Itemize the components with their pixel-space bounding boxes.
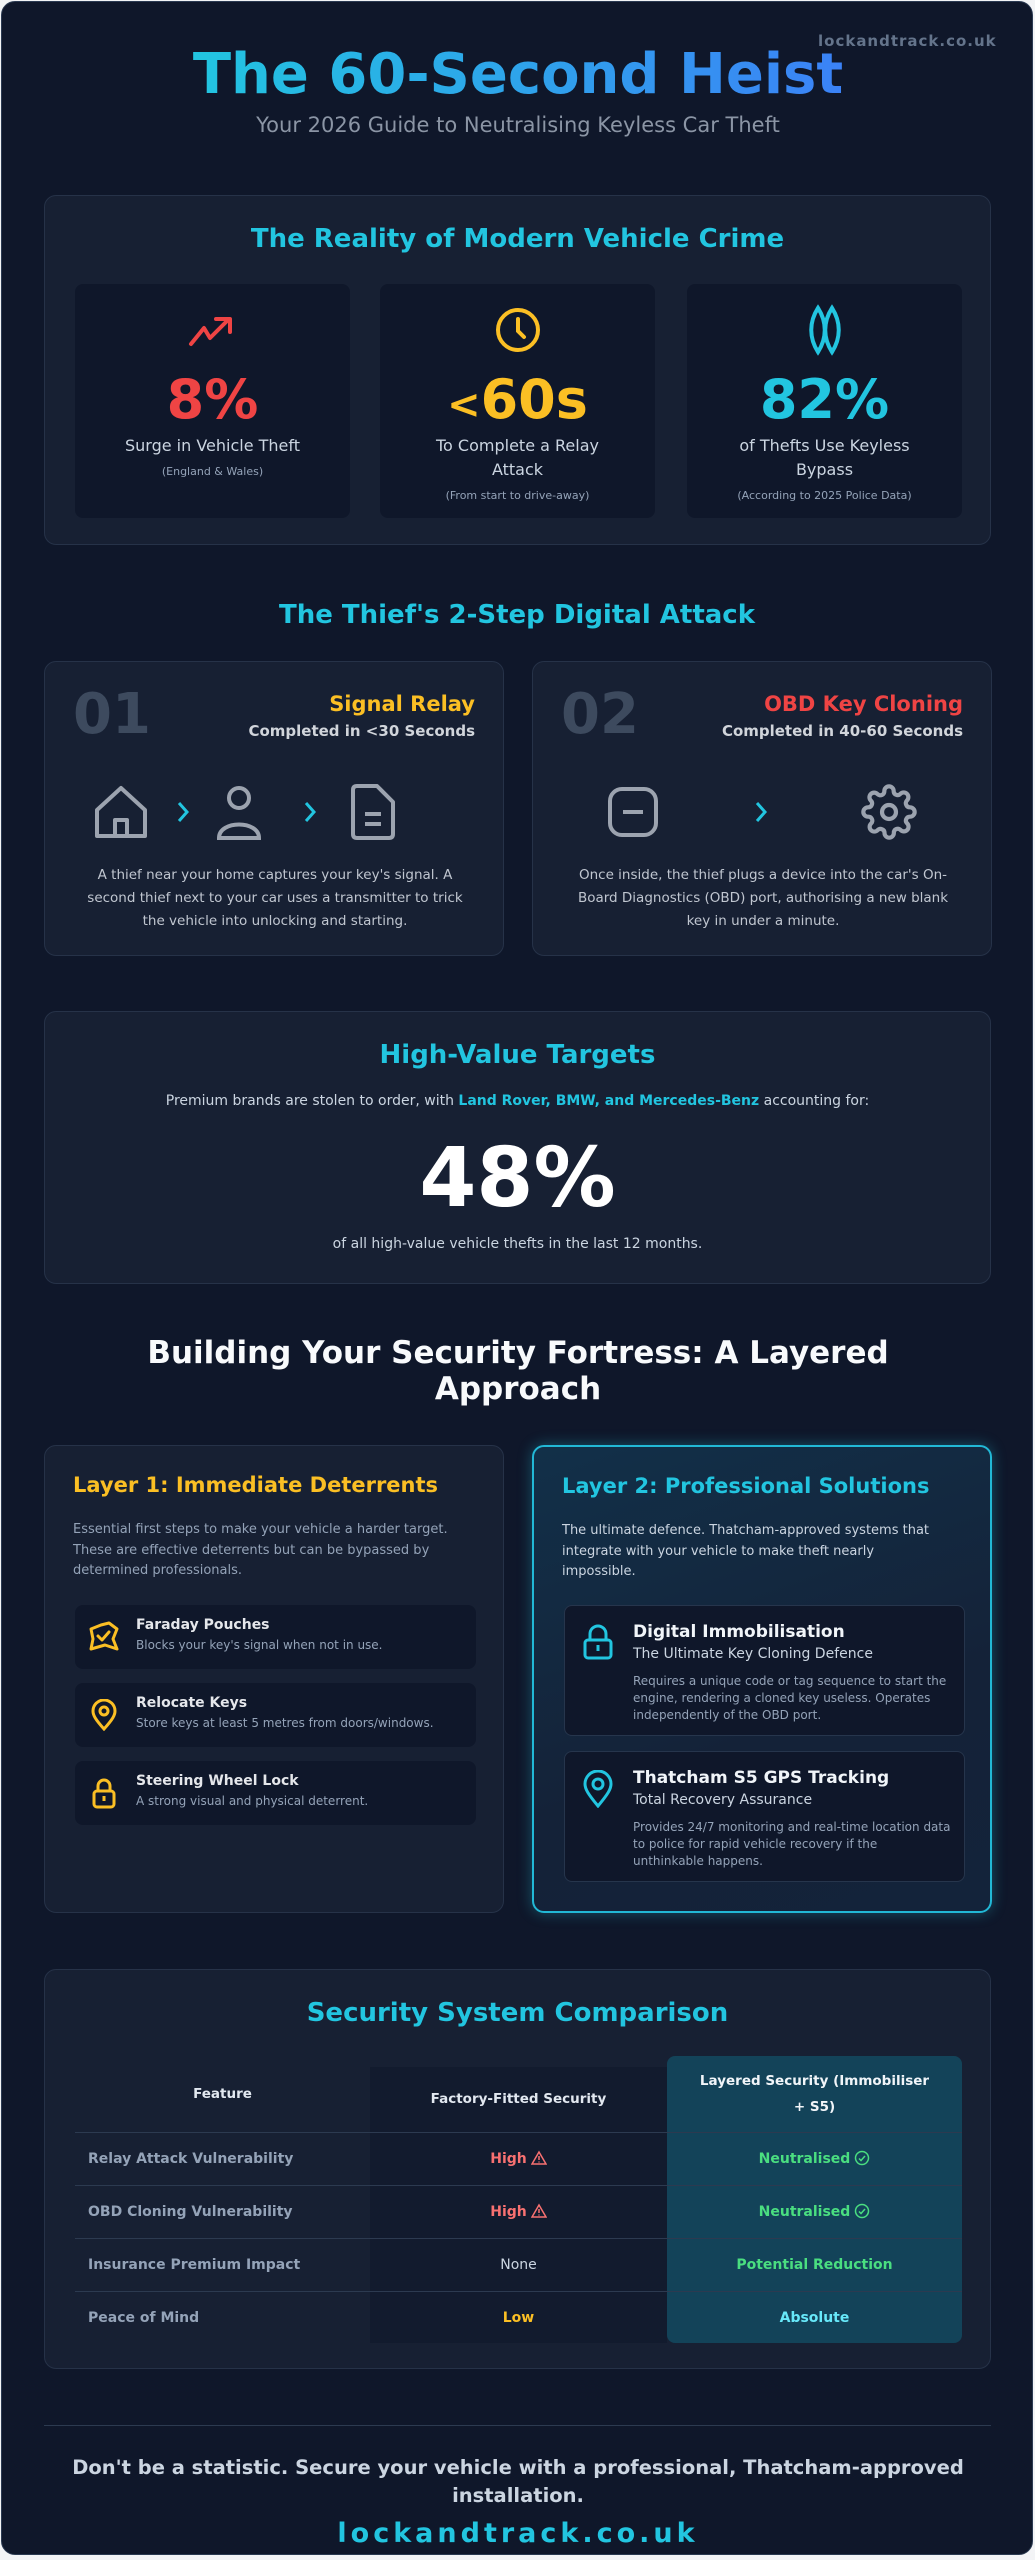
- item: steering wheel lock: A strong visual and physical deterrent.: [136, 1794, 368, 1808]
- stat: 82%: of Thefts Use Keyless Bypass: [739, 436, 910, 479]
- panel: comparison table: Potential Reduction: [736, 2256, 893, 2272]
- icon: signal: [809, 304, 841, 356]
- icon flow: port, gear: [608, 784, 917, 840]
- item: relocate keys: [75, 1683, 476, 1747]
- icon flow: house, person, doc: [95, 784, 395, 840]
- stat: 82%: (According to 2025 Police Data): [737, 489, 912, 502]
- panel: layer 2 professional: [532, 1445, 992, 1913]
- panel: comparison table: Absolute: [780, 2310, 849, 2326]
- panel: comparison table: High: [490, 2204, 527, 2220]
- panel: comparison table: [44, 1969, 991, 2369]
- comparison table: [75, 2056, 962, 2343]
- layer 2 description: The ultimate defence. Thatcham-approved systems that integrate with your vehicle to make theft nearly impossible.: [562, 1523, 929, 1579]
- step title: Completed in 40-60 Seconds: [722, 722, 963, 740]
- layer 1 heading: Layer 1: Immediate Deterrents: [73, 1473, 438, 1497]
- heading: comparison: Security System Comparison: [307, 1998, 728, 2028]
- step description: Once inside, the thief plugs a device into the car's On-Board Diagnostics (OBD) port, authorising a new blank key in under a minute.: [578, 867, 948, 929]
- panel: comparison table: Feature: [193, 2086, 252, 2102]
- panel: layer 1 deterrents: [44, 1445, 504, 1913]
- panel: comparison table: Neutralised: [759, 2204, 850, 2220]
- panel: comparison table: Layered Security (Immobiliser: [700, 2073, 929, 2089]
- heading: two-step attack: The Thief's 2-Step Digital Attack: [279, 600, 755, 630]
- item: faraday pouches: [75, 1605, 476, 1669]
- stat: 60s: [380, 284, 655, 518]
- panel: step 2 OBD cloning: [532, 661, 992, 956]
- stat: 8%: Surge in Vehicle Theft: [125, 436, 300, 455]
- stat: 60s: To Complete a Relay Attack: [436, 436, 599, 479]
- item: S5 GPS tracking: [564, 1751, 965, 1882]
- step title: OBD Key Cloning: [764, 692, 963, 716]
- site tag top right: lockandtrack.co.uk: [818, 32, 997, 50]
- item: faraday pouches: Blocks your key's signal when not in use.: [136, 1638, 382, 1652]
- panel: high-value targets: [44, 1011, 991, 1284]
- icon: clock: [496, 308, 540, 352]
- panel: comparison table: Peace of Mind: [88, 2310, 199, 2326]
- heading: reality: The Reality of Modern Vehicle Crime: [251, 224, 784, 254]
- panel: comparison table: Low: [503, 2310, 534, 2326]
- website url: lockandtrack.co.uk: [337, 2518, 699, 2549]
- stat: 82%: [687, 284, 962, 518]
- step title: Completed in <30 Seconds: [248, 722, 475, 740]
- subtitle: Your 2026 Guide to Neutralising Keyless Car Theft: [256, 113, 780, 137]
- item: steering wheel lock: Steering Wheel Lock: [136, 1773, 299, 1789]
- item: faraday pouches: Faraday Pouches: [136, 1617, 270, 1633]
- icon: trend up: [188, 317, 232, 346]
- CTA text: Don't be a statistic. Secure your vehicle with a professional, Thatcham-approved installation.: [72, 2456, 964, 2507]
- title: The 60-Second Heist: [193, 42, 843, 107]
- item: relocate keys: Relocate Keys: [136, 1695, 247, 1711]
- item: digital immobilisation: [564, 1605, 965, 1736]
- layer 2 heading: Layer 2: Professional Solutions: [562, 1474, 929, 1498]
- step description: A thief near your home captures your key's signal. A second thief next to your car uses a transmitter to trick the vehicle into unlocking and starting.: [87, 867, 463, 929]
- panel: comparison table: High: [490, 2151, 527, 2167]
- panel: comparison table: Factory-Fitted Security: [431, 2091, 606, 2107]
- stat: 60s: (From start to drive-away): [446, 489, 589, 502]
- stat: 82%: 82%: [760, 368, 889, 431]
- step title: Signal Relay: [329, 692, 475, 716]
- footnote text: of all high-value vehicle thefts in the last 12 months.: [333, 1236, 702, 1252]
- panel: comparison table: + S5): [794, 2099, 835, 2115]
- item: S5 GPS tracking: Total Recovery Assurance: [633, 1792, 812, 1808]
- item: digital immobilisation: Digital Immobilisation: [633, 1622, 845, 1642]
- stat: 60s: <60s: [447, 368, 588, 431]
- stat: 8%: [75, 284, 350, 518]
- item: digital immobilisation: The Ultimate Key Cloning Defence: [633, 1646, 873, 1662]
- panel: comparison table: Relay Attack Vulnerability: [88, 2150, 293, 2166]
- panel: comparison table: None: [500, 2256, 537, 2272]
- step number 02: 02: [561, 682, 639, 747]
- step title: [248, 692, 475, 740]
- step title: [722, 692, 963, 740]
- item: steering wheel lock: [75, 1761, 476, 1825]
- panel: step 1 signal relay: [44, 661, 504, 956]
- big stat 48%: 48%: [419, 1131, 616, 1226]
- item: digital immobilisation: Requires a unique code or tag sequence to start the engine, rendering a cloned key useless. Operates independently of the OBD port.: [633, 1674, 946, 1722]
- stat: 8%: (England & Wales): [162, 465, 263, 478]
- heading: security fortress: Building Your Security Fortress: A Layered Approach: [147, 1335, 889, 1407]
- intro text: Premium brands are stolen to order, with Land Rover, BMW, and Mercedes-Benz accounting for:: [166, 1093, 869, 1109]
- item: S5 GPS tracking: Thatcham S5 GPS Tracking: [633, 1768, 889, 1788]
- item: relocate keys: Store keys at least 5 metres from doors/windows.: [136, 1716, 434, 1730]
- heading: high-value: High-Value Targets: [380, 1040, 655, 1070]
- panel: comparison table: Insurance Premium Impact: [88, 2256, 300, 2272]
- layer 1 description: Essential first steps to make your vehicle a harder target. These are effective deterrents but can be bypassed by determined professionals.: [73, 1522, 448, 1578]
- panel: reality stats: [44, 195, 991, 545]
- item: S5 GPS tracking: Provides 24/7 monitoring and real-time location data to police for rapid vehicle recovery if the unthinkable happens.: [633, 1820, 950, 1868]
- panel: comparison table: OBD Cloning Vulnerability: [88, 2204, 293, 2220]
- stat: 8%: 8%: [167, 368, 258, 431]
- step number 01: 01: [73, 682, 151, 747]
- panel: comparison table: Neutralised: [759, 2151, 850, 2167]
